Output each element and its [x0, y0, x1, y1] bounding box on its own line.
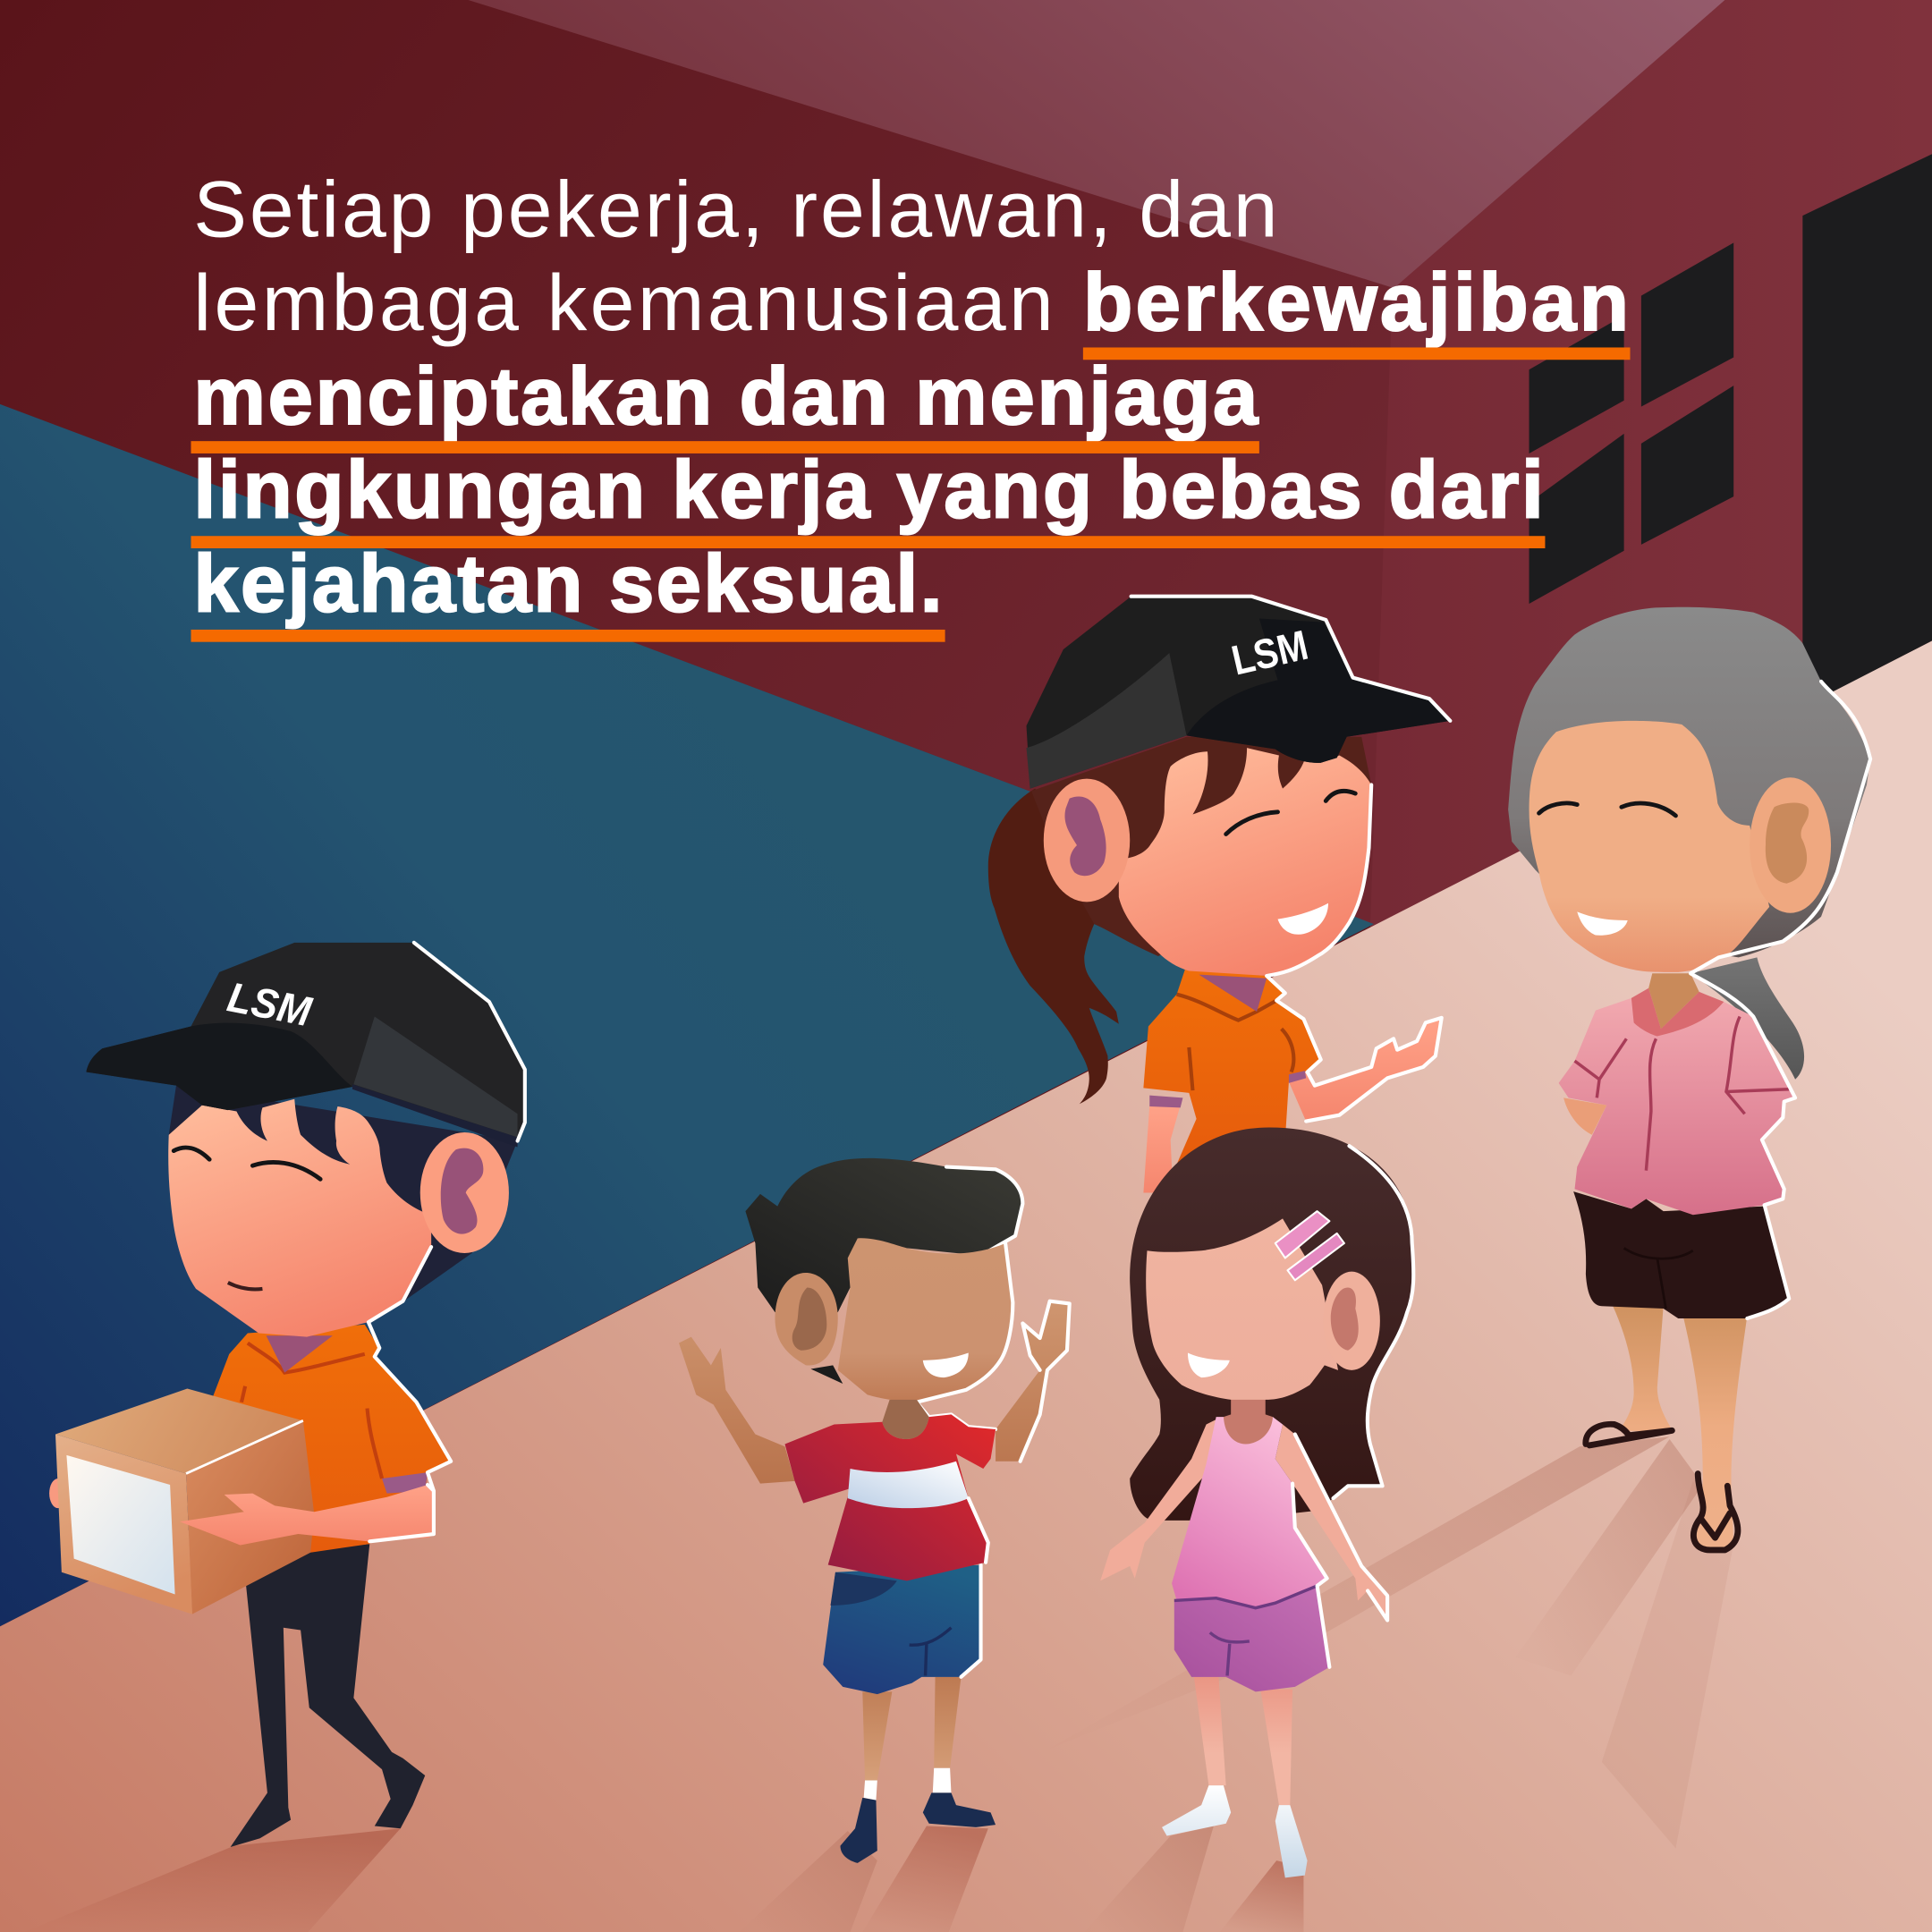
girl ear — [1323, 1272, 1380, 1370]
worker cap — [1027, 597, 1450, 789]
box edge highlight — [186, 1420, 303, 1474]
grandmother shirt — [1559, 992, 1795, 1215]
grandmother collar — [1631, 988, 1724, 1037]
background: floor — [0, 640, 1932, 1932]
box front face — [55, 1434, 192, 1614]
worker shirt details — [1177, 995, 1293, 1090]
girl shorts outline — [1292, 1484, 1329, 1667]
boy shorts — [823, 1564, 981, 1694]
girl legs — [1194, 1677, 1292, 1805]
orange underlines — [191, 347, 1631, 642]
clip bottom bar — [1288, 1233, 1344, 1280]
male worker shirt — [213, 1325, 451, 1553]
title line 1: Setiap pekerja, relawan, dan — [193, 164, 1278, 253]
boy shirt white stripe — [848, 1462, 969, 1508]
box right face — [186, 1420, 314, 1614]
character: female worker — [988, 597, 1450, 1192]
girl hair outline — [1334, 1146, 1413, 1498]
box — [55, 1388, 314, 1614]
background: left maroon wall — [0, 0, 1399, 927]
boy shorts outline — [961, 1564, 981, 1677]
male worker sleeve cuff — [382, 1472, 428, 1494]
title line 5 bold: kejahatan seksual. — [193, 538, 943, 629]
male worker face — [168, 1099, 431, 1337]
worker shirt — [1143, 969, 1321, 1165]
character: male worker carrying box — [49, 943, 525, 1847]
girl hair back — [1130, 1127, 1413, 1521]
title line 3 bold: menciptakan dan menjaga — [193, 352, 1259, 442]
male worker cap brim — [86, 1023, 352, 1110]
grandmother shirt seams — [1575, 1016, 1789, 1171]
boy neck — [882, 1400, 929, 1439]
grandmother hair tail — [1690, 957, 1804, 1080]
window — [1530, 242, 1733, 604]
boy hair — [745, 1158, 1022, 1312]
boy arm outline — [1021, 1301, 1070, 1462]
boy hair outline — [946, 1167, 1022, 1256]
grandmother hair — [1508, 607, 1870, 957]
worker inner ear — [1064, 796, 1106, 876]
background: blue wall — [0, 404, 1374, 1626]
boy shorts crease — [910, 1628, 951, 1675]
grandmother eyes — [1539, 803, 1675, 816]
grandmother hands behind back — [1563, 1097, 1785, 1141]
boy under-ear shadow — [810, 1365, 843, 1384]
girl inner ear — [1331, 1287, 1359, 1351]
worker cap dark brim — [1187, 619, 1450, 763]
male worker mouth — [228, 1283, 262, 1289]
grandmother mouth — [1577, 911, 1628, 936]
worker eyes — [1226, 791, 1355, 835]
worker cap logo: LSM — [1227, 622, 1312, 684]
background: right wall — [1370, 0, 1932, 930]
worker cap light panel — [1027, 653, 1187, 789]
grandmother legs — [1613, 1306, 1747, 1547]
character: grandmother — [1508, 607, 1870, 1550]
boy inner ear — [792, 1288, 826, 1351]
male worker inner ear — [441, 1148, 483, 1234]
boy arms — [679, 1301, 1070, 1484]
girl shorts — [1174, 1586, 1329, 1691]
male worker legs — [231, 1544, 425, 1847]
boy ear — [775, 1273, 838, 1366]
character: boy — [679, 1158, 1070, 1863]
worker face outline — [1267, 785, 1371, 1072]
male worker eyes — [174, 1148, 320, 1179]
girl arm outline — [1295, 1434, 1387, 1620]
boy shirt — [785, 1414, 996, 1580]
boy shirt outline — [969, 1498, 988, 1563]
male worker cap — [86, 943, 525, 1141]
boy face — [838, 1238, 1013, 1402]
male worker cap logo: LSM — [224, 973, 316, 1035]
male worker purple neck — [267, 1335, 333, 1373]
grandmother inner ear — [1766, 803, 1809, 884]
worker right arm and hand — [1289, 1018, 1442, 1122]
girl shorts detail — [1174, 1586, 1318, 1675]
boy face outline — [917, 1243, 1013, 1429]
grandmother neck — [1648, 973, 1699, 1029]
worker purple neck — [1199, 975, 1267, 1012]
male worker face outline — [369, 1247, 451, 1534]
title line 2 bold: berkewajiban — [1083, 258, 1629, 348]
boy shorts pocket — [830, 1572, 897, 1606]
girl mouth — [1188, 1353, 1230, 1377]
male worker arm outline — [369, 1485, 434, 1541]
male worker hair back — [169, 1086, 518, 1306]
girl socks and shoes — [1162, 1785, 1308, 1877]
boy mouth — [923, 1353, 969, 1377]
floor shadows — [25, 1436, 1733, 1932]
worker hair — [1031, 737, 1371, 956]
male worker cap band — [352, 1084, 518, 1147]
worker sleeve cuff — [1149, 1071, 1306, 1107]
worker arm outline — [1306, 1018, 1442, 1122]
worker ear — [1044, 779, 1130, 902]
boy shoes — [840, 1792, 996, 1863]
clip top bar — [1275, 1211, 1329, 1258]
male worker ear — [420, 1132, 509, 1253]
girl top — [1172, 1417, 1327, 1608]
boy socks — [864, 1768, 951, 1801]
male worker cap light panel — [353, 1016, 518, 1137]
box top face — [55, 1388, 303, 1474]
grandmother ear — [1750, 777, 1831, 913]
girl face — [1146, 1218, 1338, 1400]
grandmother shorts crease — [1624, 1248, 1693, 1309]
worker face — [1119, 748, 1371, 976]
worker ponytail — [988, 789, 1119, 1104]
title line 2 regular: lembaga kemanusiaan — [193, 258, 1054, 347]
door — [1802, 154, 1932, 708]
grandmother shorts — [1573, 1191, 1789, 1318]
character: girl — [1100, 1127, 1413, 1877]
worker left arm — [1143, 1106, 1181, 1192]
male worker shirt details — [242, 1343, 382, 1479]
worker mouth — [1278, 903, 1328, 935]
girl hair clip — [1275, 1211, 1344, 1280]
background: ceiling — [468, 0, 1725, 290]
box white label — [66, 1455, 175, 1595]
worker cap outline — [1131, 597, 1450, 721]
boy legs — [862, 1677, 961, 1781]
title line 4 bold: lingkungan kerja yang bebas dari — [193, 445, 1544, 536]
title text — [193, 164, 1629, 629]
male worker far hand — [49, 1479, 66, 1508]
grandmother outline — [1690, 682, 1870, 1318]
male worker cap outline — [414, 943, 525, 1141]
girl neck — [1224, 1393, 1273, 1444]
grandmother sandals — [1586, 1424, 1738, 1550]
male worker arm and hand — [180, 1485, 434, 1545]
grandmother face — [1530, 721, 1769, 972]
girl arms — [1100, 1419, 1387, 1620]
